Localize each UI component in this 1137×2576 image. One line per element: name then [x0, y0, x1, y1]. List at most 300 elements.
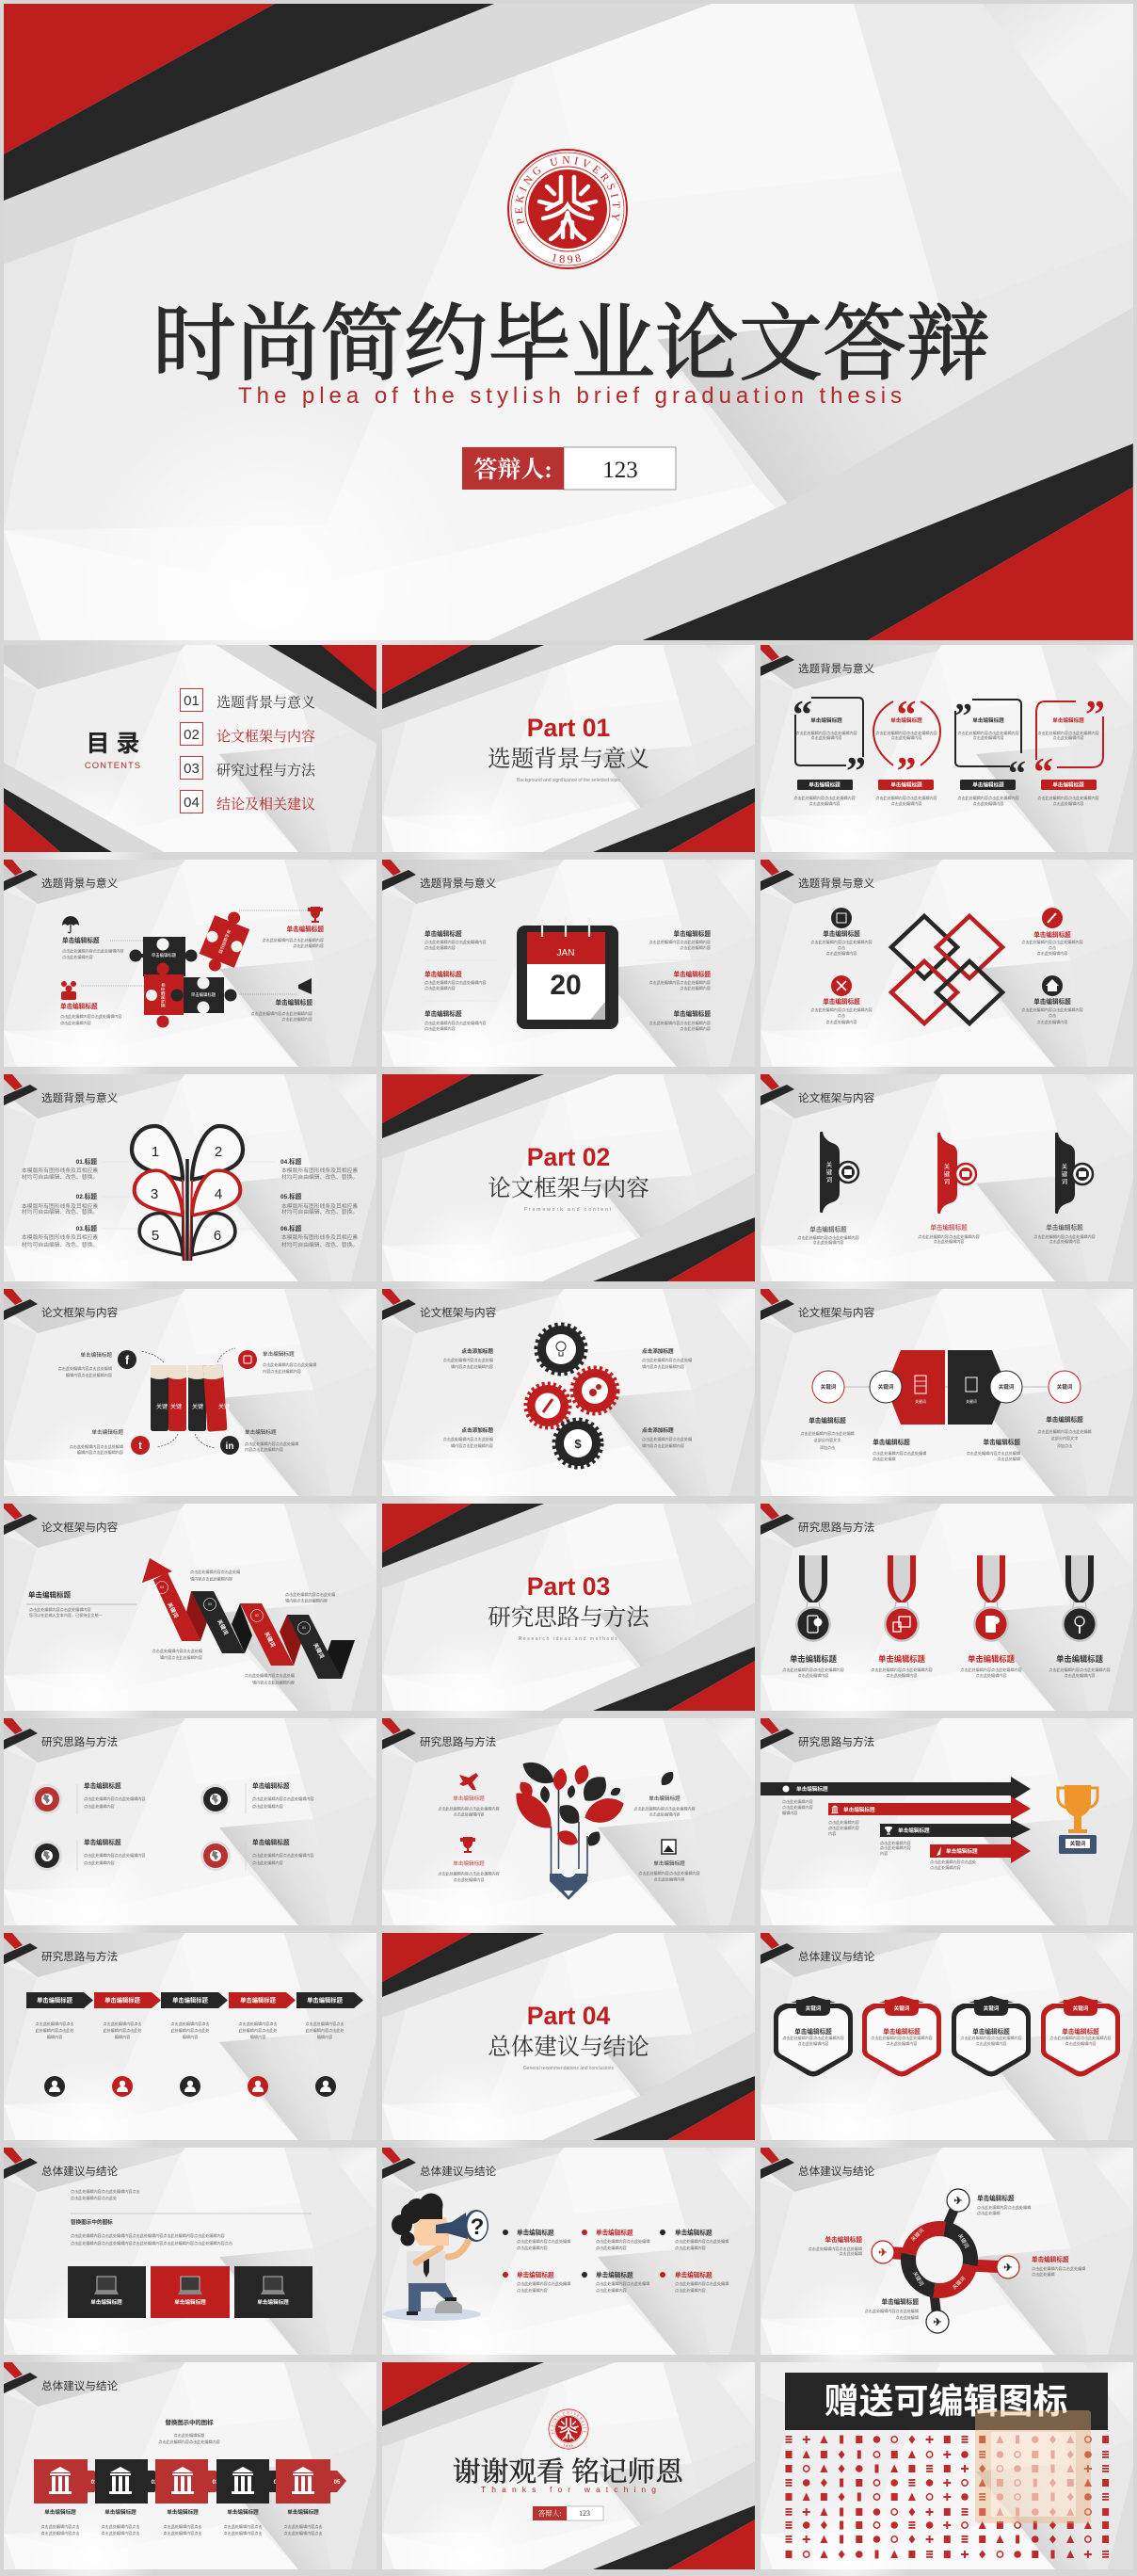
- tab 1: 关: [826, 1160, 833, 1168]
- right captions: 辑内容点击此处编辑内容: [642, 1442, 684, 1448]
- zigzag ribbon: 03: [208, 1602, 212, 1606]
- part number: Part 02: [527, 1143, 610, 1171]
- arrow captions: 点击此处编辑内容: [880, 1840, 911, 1845]
- presenter badge: 123: [602, 458, 638, 483]
- zigzag ribbon: 02: [255, 1614, 259, 1618]
- arrow 2: [828, 1796, 1031, 1820]
- person icons: [44, 2076, 336, 2097]
- icon: trophy: 关键词: [1070, 1840, 1086, 1847]
- captions: 点击此处编辑内容点击此处编辑: [263, 1361, 316, 1367]
- arrow captions: 内容: [880, 1850, 888, 1856]
- banner: 赠送可编辑图标: [825, 2382, 1067, 2421]
- left captions: [22, 1157, 98, 1248]
- text blocks: 点击: [1049, 944, 1056, 950]
- captions: 辑内容点击此处编辑内容: [190, 1576, 232, 1582]
- item 3: 点击此处编辑内容: [84, 1860, 115, 1865]
- captions: 添加点击: [820, 1444, 835, 1450]
- step 5: 05: [334, 2480, 341, 2486]
- quote box 3: 点击此处编辑内容: [973, 734, 1003, 740]
- captions: 单击编辑标题: [873, 1438, 910, 1446]
- panel: part 03: [382, 1504, 755, 1760]
- right text: 点击此处编辑内容: [680, 1025, 711, 1031]
- arrow captions: 点击此处编辑内容: [930, 1864, 961, 1870]
- step 4: [216, 2459, 286, 2536]
- grid of items: 点击此处编辑内容点击此处编辑: [517, 2238, 570, 2244]
- slide title: 选题背景与意义: [41, 877, 119, 890]
- chevron captions: 点击此处编辑内容点击: [171, 2021, 209, 2026]
- ring diagram: ✈: [1003, 2262, 1013, 2274]
- right captions: 本模版所有图形线条及其相应素: [281, 1167, 358, 1174]
- left captions: 03.标题: [76, 1224, 97, 1232]
- right text: 点击此处编辑内容: [680, 944, 711, 950]
- slide title: 论文框架与内容: [420, 1306, 497, 1319]
- slide title: 研究思路与方法: [798, 1735, 874, 1748]
- chevron captions: 此处编辑内容点击此处: [239, 2027, 277, 2033]
- captions: [793, 795, 1099, 806]
- intro text: 替换图示中的图标: [71, 2218, 113, 2226]
- part number: Part 01: [527, 714, 610, 742]
- chevron row: [26, 1992, 363, 2008]
- step 3: 03: [213, 2480, 219, 2486]
- quote box 2: ”: [896, 750, 917, 794]
- text blocks: 单击编辑标题: [823, 929, 860, 938]
- tree illustration: [508, 1757, 628, 1900]
- label row: 单击编辑标题: [1052, 781, 1084, 789]
- left captions: 本模版所有图形线条及其相应素: [22, 1233, 98, 1241]
- text blocks: [810, 929, 1083, 1024]
- ring captions: 点击此处编辑: [1032, 2271, 1055, 2277]
- shield 4: 单击编辑标题: [1062, 2027, 1099, 2036]
- text blocks: 点击此处编辑内容: [293, 942, 324, 948]
- grid of items: 点击此处编辑内容点击此处编辑: [675, 2238, 729, 2244]
- arrow captions: 点击此处编辑内容: [782, 1804, 813, 1810]
- captions: [58, 1350, 316, 1455]
- heading: english contents: CONTENTS: [85, 761, 141, 771]
- petal diagram: 3: [151, 1186, 158, 1202]
- text blocks: 点击此处编辑内容点击此处编辑内容: [262, 937, 324, 942]
- text blocks: 点击此处编辑内容点击此处编辑内容: [250, 1010, 312, 1016]
- captions: 点击此处编辑内容: [809, 800, 840, 806]
- tab 3: 点击此处编辑内容: [1049, 1238, 1080, 1244]
- gear: cogs: [572, 1368, 617, 1413]
- slide title: 选题背景与意义: [420, 877, 497, 890]
- shield 1: 点击此处编辑内容: [798, 2040, 828, 2046]
- quote box 1: 单击编辑标题: [810, 716, 842, 724]
- shield 4: 点击此处编辑内容点击此处编辑内容: [1049, 2035, 1112, 2040]
- item 04: 04: [184, 795, 200, 811]
- captions: 点击此处编辑内容点击此处编辑: [873, 1450, 926, 1456]
- panel: zigzag arrow: [4, 1504, 376, 1760]
- text blocks: 点击此处编辑内容: [281, 1016, 312, 1022]
- chevron captions: 点击此处编辑内容点击: [104, 2021, 141, 2026]
- chevron captions: 编辑内容: [317, 2034, 332, 2039]
- ring diagram: ✈: [953, 2196, 963, 2207]
- text blocks: 点击此处编辑内容: [62, 954, 93, 959]
- medal 2: 点击此处编辑内容点击此处编辑内容: [871, 1666, 933, 1672]
- captions: 点击此处编辑内容点击此处编辑: [1037, 1428, 1092, 1434]
- chevron captions: 编辑内容: [115, 2034, 130, 2039]
- interlocked diamonds: [891, 916, 1002, 1023]
- chevron captions: 编辑内容: [47, 2034, 62, 2039]
- right captions: 05.标题: [280, 1192, 302, 1200]
- shield 2: 关键词: [894, 2004, 910, 2012]
- text blocks: 点击此处编辑内容点击此处编辑内容: [1021, 1006, 1083, 1012]
- ring captions: 点击此处编辑内容点击此处编辑: [865, 2308, 919, 2313]
- grid of items: 点击此处编辑内容点击此处编辑: [596, 2280, 649, 2286]
- shield 1: 关键词: [806, 2004, 822, 2012]
- text blocks: 点击此处编辑内容点击此处编辑内容: [638, 1870, 700, 1876]
- keyword circles: 关键词: [1057, 1383, 1073, 1391]
- tab 3: [1033, 1133, 1096, 1244]
- text blocks: 单击编辑标题: [453, 1860, 485, 1867]
- intro text: 点击此处编辑内容点击此处编辑内容点击: [71, 2188, 140, 2194]
- quote box 2: “: [896, 694, 917, 737]
- text blocks: 点击此处编辑内容: [649, 1811, 680, 1817]
- captions: 这部分内容文字: [1051, 1435, 1078, 1441]
- text blocks: 点击此处编辑内容: [454, 1811, 484, 1817]
- text blocks: 单击编辑标题: [1033, 930, 1071, 939]
- item 1: [32, 1781, 145, 1814]
- step 2: 点击此处编辑内容点击: [102, 2530, 139, 2536]
- quote box 1: “: [793, 694, 812, 737]
- quote box 2: [873, 694, 940, 794]
- shield 4: 关键词: [1073, 2004, 1089, 2012]
- captions: 内容点击此处编辑内容: [263, 1368, 301, 1374]
- captions: 编辑内容点击此处编辑内容: [77, 1449, 123, 1455]
- social icons and arrows: [118, 1348, 257, 1455]
- gear: bulb: [536, 1325, 585, 1374]
- item 1: 点击此处编辑内容: [84, 1803, 115, 1809]
- ring captions: 点击此处编辑内容点击此处编辑: [1032, 2265, 1085, 2271]
- icon: university seal: PEKING UNIVERSITY: [516, 156, 620, 225]
- tab 2: 词: [944, 1178, 950, 1185]
- puzzle graphic: 单击编辑标题: [152, 952, 177, 958]
- main caption: 点击此处编辑内容点击此处编辑内容: [29, 1606, 90, 1612]
- icons: [459, 1769, 677, 1854]
- ring captions: 点击此处编辑: [895, 2314, 919, 2320]
- zigzag ribbon: 04: [160, 1586, 164, 1589]
- ring captions: 单击编辑标题: [881, 2297, 919, 2306]
- zigzag ribbon: 关键词: [312, 1642, 326, 1660]
- captions: 单击编辑标题: [1046, 1415, 1083, 1424]
- text blocks: 单击编辑标题: [62, 936, 100, 944]
- main caption: [26, 1589, 136, 1618]
- label row: 单击编辑标题: [809, 781, 841, 789]
- panel: hexagon: [761, 1289, 1133, 1545]
- left captions: 01.标题: [76, 1157, 97, 1166]
- chevron captions: 此处编辑内容点击此处: [306, 2027, 344, 2033]
- chevron captions: [36, 2021, 344, 2039]
- arrow captions: 点击此处编辑内容: [880, 1844, 911, 1850]
- quote box 4: 点击此处编辑内容: [1053, 734, 1083, 740]
- label row: 单击编辑标题: [972, 781, 1004, 789]
- text blocks: 点击: [838, 944, 845, 950]
- icon: university seal: 1898: [552, 254, 581, 264]
- item 02: [181, 723, 315, 746]
- item 4: 点击此处编辑内容点击此处编辑内容: [252, 1852, 314, 1858]
- quote box 4: “: [1033, 751, 1053, 795]
- tab 1: [797, 1132, 859, 1245]
- right captions: 点击添加标题: [642, 1426, 674, 1434]
- left captions: 02.标题: [76, 1192, 97, 1200]
- ring diagram: 关键词: [951, 2275, 968, 2291]
- left text: 点击此处编辑内容点击此处编辑内容: [424, 979, 486, 985]
- left captions: 辑内容点击此处编辑内容: [451, 1442, 493, 1448]
- tab 3: 键: [1062, 1169, 1068, 1178]
- chevron row: 单击编辑标题: [172, 1996, 209, 2004]
- presenter badge: 答辩人:: [473, 457, 552, 483]
- grid of items: 单击编辑标题: [596, 2228, 633, 2237]
- slide title: 研究思路与方法: [798, 1521, 874, 1534]
- shield 2: [862, 1996, 941, 2077]
- box 1: 单击编辑标题: [90, 2298, 122, 2306]
- right text: 单击编辑标题: [673, 970, 711, 978]
- item 01: [181, 689, 315, 712]
- text blocks: 点击此处编辑内容: [654, 1876, 684, 1881]
- zigzag ribbon: 关键词: [216, 1618, 230, 1636]
- part subtitle: Background and significance of the selected topic: [517, 778, 620, 783]
- split hexagon: 关键词: [915, 1399, 926, 1404]
- medal 4: [1049, 1555, 1111, 1678]
- icons: [831, 908, 1063, 996]
- quote box 3: ”: [954, 697, 972, 736]
- social icons and arrows: f: [125, 1353, 130, 1367]
- slide title: 总体建议与结论: [41, 2379, 119, 2392]
- chevron captions: 此处编辑内容点击此处: [104, 2027, 141, 2033]
- step 1: 点击此处编辑内容点击: [41, 2530, 79, 2536]
- text blocks: 单击编辑标题: [60, 1002, 98, 1010]
- step 1: 单击编辑标题: [44, 2508, 76, 2516]
- grid of items: 点击此处编辑内容点击此处编辑: [675, 2280, 729, 2286]
- medal 2: 点击此处编辑内容: [887, 1672, 917, 1678]
- zigzag ribbon: 关键词: [263, 1631, 277, 1649]
- medal 4: 点击此处编辑内容: [1065, 1672, 1095, 1678]
- tab 1: 词: [826, 1176, 832, 1183]
- panel: part 04: [382, 1933, 755, 2189]
- captions: 点击此处编辑内容点击此处编辑: [800, 1430, 855, 1436]
- text blocks: 点击此处编辑内容点击此处编辑内容: [810, 1006, 873, 1012]
- captions: 点击此处编辑内容: [1053, 800, 1083, 806]
- panel: cover slide: [4, 4, 1133, 702]
- arrow captions: 点击此处编辑内容: [828, 1819, 859, 1825]
- panel: part 02: [382, 1074, 755, 1330]
- arrow 1: 单击编辑标题: [796, 1785, 828, 1793]
- left captions: 辑内容点击此处编辑内容: [451, 1363, 493, 1369]
- shield 2: 点击此处编辑内容点击此处编辑内容: [871, 2035, 933, 2040]
- part number: Part 04: [527, 2002, 610, 2030]
- box 2: [151, 2266, 230, 2318]
- ring captions: 点击此处编辑: [839, 2250, 862, 2256]
- captions: 单击编辑标题: [91, 1428, 123, 1436]
- panel: character with telescope: [382, 2148, 755, 2404]
- item 02: 02: [184, 727, 200, 743]
- arrow 1: [761, 1777, 1031, 1801]
- captions: 点击此处编辑内容: [891, 800, 921, 806]
- part title: 总体建议与结论: [488, 2034, 649, 2060]
- left captions: 点击此处编辑内容点击此处编: [443, 1357, 493, 1362]
- step 1: [34, 2459, 104, 2536]
- item 4: [200, 1838, 314, 1871]
- panel: diamonds: [761, 860, 1133, 1116]
- slide title: 总体建议与结论: [420, 2165, 497, 2178]
- captions: 单击编辑标题: [80, 1351, 112, 1359]
- captions: 点击此处编辑内容点击此处编辑: [967, 1450, 1020, 1456]
- arrow 2: 单击编辑标题: [843, 1806, 875, 1813]
- ring captions: 点击此处编辑内容点击此处编辑: [977, 2204, 1031, 2210]
- step 3: 点击此处编辑内容点击: [164, 2530, 201, 2536]
- text blocks: 点击此处编辑内容点击此处编辑内容: [62, 947, 124, 953]
- illustration: man with telescope: [383, 2194, 488, 2321]
- captions: 点击此处编辑内容点击此处编: [245, 1672, 295, 1678]
- captions: 点击此处编辑内容点击此处编: [190, 1569, 240, 1574]
- step 3: [155, 2459, 225, 2536]
- captions: 辑内容点击此处编辑内容: [252, 1680, 295, 1685]
- panel: four circles: [4, 1718, 376, 1974]
- arrow captions: 点击此处编辑内容: [782, 1798, 813, 1804]
- left text: 点击此处编辑内容: [424, 985, 456, 990]
- text blocks: [60, 925, 324, 1025]
- ring diagram: ✈: [878, 2247, 888, 2259]
- text blocks: 点击此处编辑内容: [826, 1019, 857, 1024]
- left text: 点击此处编辑内容点击此处编辑内容: [424, 939, 486, 944]
- keyword circles: 关键词: [999, 1383, 1015, 1391]
- step 4: 04: [274, 2480, 280, 2486]
- right captions: 辑内容点击此处编辑内容: [642, 1363, 684, 1369]
- calendar icon: [517, 918, 618, 1029]
- arrow captions: 内容: [828, 1830, 836, 1836]
- panel: ring: [761, 2148, 1133, 2404]
- captions: 点击此处编辑内容点击此处编辑内容: [1037, 795, 1099, 800]
- grid of items: 点击此处编辑内容: [596, 2245, 627, 2250]
- item 2: 点击此处编辑内容: [252, 1803, 283, 1809]
- grid of items: 点击此处编辑内容: [517, 2245, 548, 2250]
- slide title: 选题背景与意义: [41, 1091, 119, 1104]
- medal 1: 点击此处编辑内容点击此处编辑内容: [782, 1666, 844, 1672]
- intro text: 替换图示中的图标: [165, 2418, 214, 2426]
- illustration: man with telescope: ?: [471, 2214, 484, 2240]
- part subtitle: General recommendations and conclusions: [523, 2066, 615, 2071]
- intro text: 点击此处编辑内容点击此处: [71, 2195, 117, 2200]
- book stack: 关键: [170, 1403, 182, 1410]
- quote box 3: [954, 697, 1026, 794]
- item 2: 点击此处编辑内容点击此处编辑内容: [252, 1795, 314, 1801]
- part title: 选题背景与意义: [488, 746, 649, 772]
- left text: [424, 929, 497, 1031]
- chevron captions: 此处编辑内容点击此处: [171, 2027, 209, 2033]
- quote box 2: 点击此处编辑内容: [891, 734, 921, 740]
- grid of items: 单击编辑标题: [675, 2271, 713, 2278]
- presenter badge: 123: [579, 2509, 590, 2518]
- shield 2: 点击此处编辑内容: [887, 2040, 917, 2046]
- right text: 点击此处编辑内容点击此处编辑内容: [649, 939, 711, 944]
- petal diagram: [102, 1126, 276, 1261]
- captions: 点击此处编辑内容点击此处编辑: [70, 1443, 123, 1449]
- text blocks: 点击此处编辑内容点击此处编辑内容: [60, 1013, 122, 1019]
- main caption: 您可以在此输入文本内容，已保持全文统一: [29, 1612, 103, 1618]
- medal 1: 点击此处编辑内容: [798, 1672, 828, 1678]
- icons and leader lines: [61, 907, 323, 1000]
- tab 2: 点击此处编辑内容: [934, 1238, 964, 1244]
- arrow 3: 单击编辑标题: [898, 1827, 930, 1834]
- step 2: [95, 2459, 164, 2536]
- keyword circles: 关键词: [821, 1383, 837, 1391]
- ring captions: 单击编辑标题: [825, 2235, 862, 2244]
- panel: three boxes: [4, 2148, 376, 2404]
- ring captions: 单击编辑标题: [977, 2194, 1015, 2202]
- tab 1: 单击编辑标题: [809, 1225, 847, 1233]
- shield 3: [952, 1996, 1031, 2077]
- step 5: 点击此处编辑内容点击: [284, 2523, 322, 2529]
- slide title: 论文框架与内容: [798, 1306, 875, 1319]
- keyword circles: [812, 1371, 1081, 1403]
- item 3: [32, 1838, 145, 1871]
- right captions: 点击此处编辑内容点击此处编: [642, 1436, 692, 1441]
- box 3: [234, 2266, 312, 2318]
- chevron captions: 编辑内容: [183, 2034, 198, 2039]
- captions: 单击编辑标题: [983, 1438, 1020, 1446]
- step 2: 单击编辑标题: [104, 2508, 136, 2516]
- arrow 3: [880, 1819, 1031, 1839]
- right text: 点击此处编辑内容点击此处编辑内容: [649, 1020, 711, 1025]
- step 5: 点击此处编辑内容点击: [284, 2530, 322, 2536]
- panel: quotes: [761, 645, 1133, 901]
- text blocks: 点击此处编辑内容点击此处编辑内容: [633, 1806, 696, 1811]
- medal 4: 单击编辑标题: [1056, 1654, 1104, 1664]
- ring diagram: [872, 2189, 1019, 2333]
- panel: arrows and trophy: [761, 1718, 1133, 1974]
- chevron captions: 点击此处编辑内容点击: [239, 2021, 277, 2026]
- medal 3: 单击编辑标题: [968, 1654, 1016, 1664]
- ring captions: 点击此处编辑: [977, 2210, 1001, 2215]
- zigzag ribbon: 01: [302, 1626, 306, 1630]
- item 1: 点击此处编辑内容点击此处编辑内容: [84, 1795, 145, 1801]
- grid of items: 点击此处编辑内容: [675, 2245, 706, 2250]
- text blocks: 点击此处编辑内容: [826, 950, 857, 956]
- captions: [152, 1569, 335, 1685]
- slide title: 选题背景与意义: [798, 877, 875, 890]
- step 2: 点击此处编辑内容点击: [102, 2523, 139, 2529]
- thanks subtitle: Thanks for watching: [481, 2485, 656, 2494]
- captions: 点击此处编辑内容: [973, 800, 1003, 806]
- captions: 点击此处编辑内容点击此处编辑: [245, 1441, 298, 1446]
- grid of items: 单击编辑标题: [517, 2271, 554, 2278]
- shield 1: [774, 1996, 853, 2077]
- right captions: 材均可自由编辑、改色、替换。: [281, 1173, 358, 1181]
- item 1: 单击编辑标题: [84, 1781, 121, 1790]
- quote box 2: 单击编辑标题: [890, 716, 922, 724]
- text blocks: 单击编辑标题: [275, 998, 312, 1006]
- left text: 单击编辑标题: [424, 1009, 462, 1018]
- panel: thanks slide: [382, 2362, 755, 2576]
- watermark overlay: [975, 2410, 1091, 2523]
- right captions: 材均可自由编辑、改色、替换。: [281, 1208, 358, 1216]
- keyword circles: 关键词: [878, 1383, 894, 1391]
- book stack: 关键: [192, 1403, 203, 1410]
- slide title: 研究思路与方法: [41, 1735, 118, 1748]
- captions: 点击此处编辑: [873, 1456, 896, 1461]
- left captions: 材均可自由编辑、改色、替换。: [22, 1241, 98, 1248]
- left captions: 材均可自由编辑、改色、替换。: [22, 1173, 98, 1181]
- slide title: 总体建议与结论: [41, 2165, 119, 2178]
- chevron captions: 点击此处编辑内容点击: [306, 2021, 344, 2026]
- shield 4: 点击此处编辑内容: [1065, 2040, 1096, 2046]
- shield 4: [1041, 1996, 1120, 2077]
- item 03: 03: [184, 761, 200, 777]
- arrow captions: 点击此处编辑内容点击此处: [930, 1859, 976, 1864]
- chevron captions: 编辑内容: [250, 2034, 265, 2039]
- slide title: 研究思路与方法: [41, 1950, 118, 1963]
- chevron row: 单击编辑标题: [240, 1996, 277, 2004]
